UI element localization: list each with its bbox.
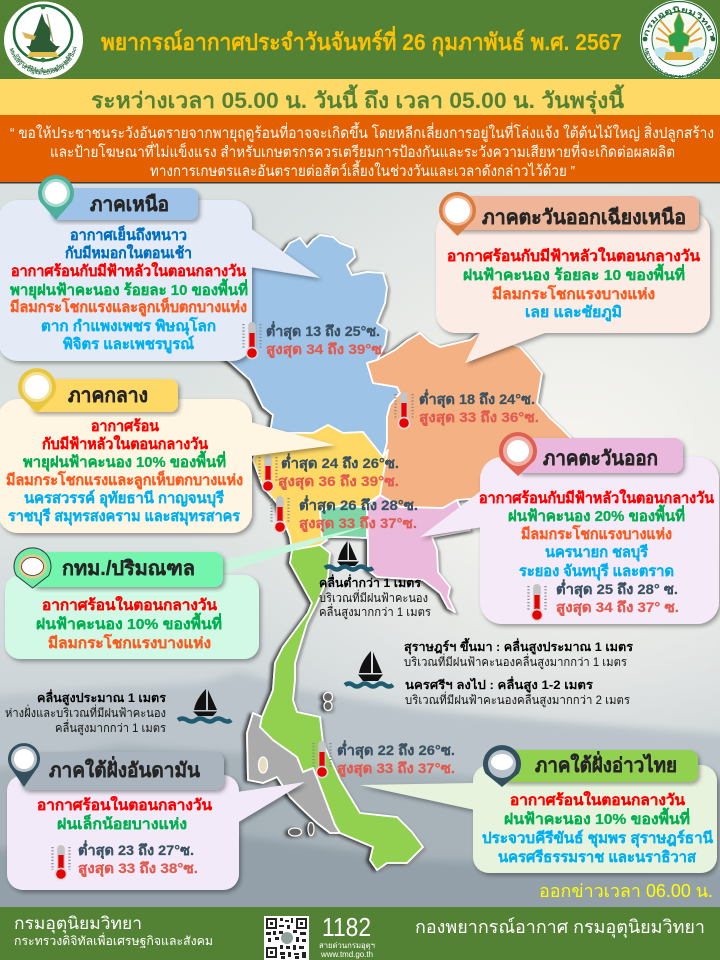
temperature: สูงสุด 33 ถึง 38°ซ. [78, 860, 198, 877]
icon: boat [345, 651, 393, 686]
forecast text: ฝนฟ้าคะนอง 20% ของพื้นที่ [508, 504, 685, 525]
temperature: central lower [272, 495, 418, 533]
islands [258, 692, 332, 836]
callout bubble [0, 200, 320, 361]
panel: northeast [436, 192, 710, 363]
logo: meteorological department: METEOROLOGICAL DEPARTMENT [644, 48, 714, 79]
region: south Gulf coast [260, 545, 423, 870]
callout bubble [5, 575, 259, 659]
heading [30, 552, 223, 587]
forecast text [37, 796, 213, 833]
forecast text: พิจิตร และเพชรบูรณ์ [63, 335, 194, 354]
heading [30, 379, 178, 412]
callout bubble [7, 775, 305, 890]
temperature: north: สูงสุด 34 ถึง 39°ซ. [266, 341, 386, 358]
icon: thermometer [244, 322, 260, 359]
footer [0, 907, 720, 960]
region: central [253, 425, 388, 550]
forecast text [482, 791, 714, 866]
forecast text [36, 596, 222, 652]
icon: pin [483, 745, 521, 787]
temperature: south gulf: สูงสุด 33 ถึง 37°ซ. [337, 760, 455, 777]
issue time: ออกข่าวเวลา 06.00 น. [539, 881, 713, 901]
sea forecast: gulf south [345, 637, 634, 708]
heading [20, 752, 224, 790]
callout bubble [420, 457, 719, 624]
header band [0, 0, 720, 79]
heading: ภาคใต้ฝั่งอ่าวไทย [535, 750, 677, 777]
panel: east [420, 432, 719, 624]
temperature: สูงสุด 34 ถึง 37° ซ. [556, 599, 679, 616]
department name [14, 914, 213, 948]
temperature: north [266, 321, 386, 358]
forecast text: อากาศร้อนในตอนกลางวัน [42, 596, 218, 614]
temperature: central upper: สูงสุด 36 ถึง 39°ซ. [278, 473, 399, 490]
title: พยากรณ์อากาศประจำวันจันทร์ที่ 26 กุมภาพันธ์ พ.ศ. 2567 [101, 25, 622, 57]
temperature: central upper [260, 453, 399, 492]
forecast text: ตาก กำแพงเพชร พิษณุโลก [41, 316, 216, 336]
time range band [0, 79, 720, 115]
forecast text: อากาศเย็นถึงหนาว [70, 225, 187, 244]
department name: กรมอุตุนิยมวิทยา [14, 914, 142, 934]
region: north [200, 235, 400, 457]
forecast text [479, 489, 715, 581]
forecast text: กับมีฟ้าหลัวในตอนกลางวัน [42, 435, 209, 453]
panel: south Andaman coast [7, 743, 305, 890]
forecast text: อากาศร้อนกับมีฟ้าหลัวในตอนกลางวัน [447, 247, 701, 265]
heading: ภาคเหนือ [90, 193, 169, 216]
forecast text: อากาศร้อนในตอนกลางวัน [37, 796, 213, 814]
sea forecast: gulf south: บริเวณที่มีฝนฟ้าคะนองคลื่นสูงมากกว่า 1 เมตร [404, 653, 628, 670]
forecast text: นครศรีธรรมราช และนราธิวาส [498, 848, 697, 866]
forecast text: นครสวรรค์ อุทัยธานี กาญจนบุรี [24, 489, 225, 508]
temperature: northeast: สูงสุด 33 ถึง 36°ซ. [419, 409, 539, 426]
sea forecast: gulf south: บริเวณที่มีฝนฟ้าคะนองคลื่นสูงมากกว่า 2 เมตร [405, 691, 631, 708]
temperature: ต่ำสุด 25 ถึง 28° ซ. [556, 579, 678, 598]
heading [450, 196, 699, 230]
icon: pin [499, 432, 537, 476]
logo: meteorological department: กรมอุตุนิยมวิทยา [644, 6, 714, 38]
forecast text: กับมีหมอกในตอนเช้า [65, 244, 192, 262]
forecast text: พายุฝนฟ้าคะนอง ร้อยละ 10 ของพื้นที่ [10, 278, 248, 300]
icon: pin [18, 368, 56, 413]
region: Bangkok and vicinity [320, 505, 367, 538]
hotline: 1182 [322, 912, 371, 942]
heading [515, 438, 683, 473]
heading [500, 750, 698, 782]
forecast text: มีลมกระโชกแรงและลูกเห็บตกบางแห่ง [6, 470, 243, 490]
heading: ภาคกลาง [68, 385, 148, 407]
heading [50, 188, 198, 220]
callout bubble [436, 212, 710, 363]
forecast text: ฝนฟ้าคะนอง ร้อยละ 10 ของพื้นที่ [463, 263, 685, 284]
forecast text: อากาศร้อนในตอนกลางวัน [510, 791, 686, 809]
heading: ภาคใต้ฝั่งอันดามัน [49, 755, 200, 782]
region: south Andaman coast [247, 713, 340, 833]
map of Thailand [200, 235, 582, 870]
forecast text: เลย และชัยภูมิ [525, 303, 622, 322]
sea forecast: gulf south: สุราษฎร์ฯ ขึ้นมา : คลื่นสูงประมาณ 1 เมตร [404, 637, 634, 655]
forecast text: อากาศร้อน [91, 418, 160, 435]
forecast text: ระยอง จันทบุรี และตราด [519, 563, 674, 581]
hotline: www.tmd.go.th [320, 950, 373, 959]
sea forecast: gulf upper: คลื่นสูงมากกว่า 1 เมตร [319, 603, 432, 620]
forecast text: ฝนฟ้าคะนอง 10% ของพื้นที่ [36, 612, 222, 633]
temperature: central lower: สูงสุด 33 ถึง 37°ซ. [299, 515, 417, 532]
hotline: สายด่วนกรมอุตุฯ [319, 941, 375, 950]
forecast text: อากาศร้อนกับมีฟ้าหลัวในตอนกลางวัน [479, 489, 715, 507]
icon: pin [439, 192, 476, 236]
sea forecast: andaman: คลื่นสูงมากกว่า 1 เมตร [55, 719, 167, 736]
forecast text: มีลมกระโชกแรงบางแห่ง [492, 284, 655, 303]
warning band [0, 115, 720, 184]
heading: ภาคตะวันออกเฉียงเหนือ [482, 206, 686, 229]
region: east [367, 495, 470, 612]
sea forecast: andaman: คลื่นสูงประมาณ 1 เมตร [37, 689, 167, 706]
panel: Bangkok and vicinity [5, 526, 366, 659]
callout bubble [360, 765, 717, 873]
sea forecast: gulf upper: คลื่นต่ำกว่า 1 เมตร [319, 574, 422, 590]
heading: ภาคตะวันออก [543, 448, 658, 470]
temperature [52, 840, 198, 880]
temperature [528, 579, 679, 621]
panel: central [0, 368, 335, 533]
icon: pin [38, 175, 74, 220]
warning band: ทางการเกษตรและอันตรายต่อสัตว์เลี้ยงในช่วงวันและเวลาดังกล่าวไว้ด้วย ” [150, 160, 575, 180]
panel: south Gulf coast [360, 745, 717, 873]
sea forecast: andaman [5, 689, 231, 736]
temperature: northeast [396, 389, 539, 429]
time range band: ระหว่างเวลา 05.00 น. วันนี้ ถึง เวลา 05.00 น. วันพรุ่งนี้ [91, 84, 625, 115]
QR code [264, 916, 309, 960]
icon: pin [8, 743, 40, 787]
temperature: central upper: ต่ำสุด 24 ถึง 26°ซ. [281, 453, 399, 472]
forecast text [6, 418, 243, 526]
temperature: central lower: ต่ำสุด 26 ถึง 28°ซ. [299, 495, 418, 514]
forecast text: ประจวบคีรีขันธ์ ชุมพร สุราษฎร์ธานี [482, 829, 714, 848]
heading: กทม./ปริมณฑล [62, 558, 195, 580]
forecast text: นครนายก ชลบุรี [545, 544, 649, 562]
sea forecast: gulf upper: บริเวณที่มีฝนฟ้าคะนอง [319, 589, 428, 605]
temperature: south gulf [314, 740, 455, 778]
hotline [319, 912, 375, 959]
temperature: south gulf: ต่ำสุด 22 ถึง 26°ซ. [337, 740, 455, 759]
forecast text: มีลมกระโชกแรงบางแห่ง [48, 633, 211, 652]
temperature: northeast: ต่ำสุด 18 ถึง 24°ซ. [419, 389, 535, 408]
forecast text: อากาศร้อนกับมีฟ้าหลัวในตอนกลางวัน [11, 262, 247, 280]
forecast text: ฝนฟ้าคะนอง 10% ของพื้นที่ [504, 807, 690, 828]
forecast bureau: กองพยากรณ์อากาศ กรมอุตุนิยมวิทยา [415, 917, 705, 938]
temperature: ต่ำสุด 23 ถึง 27°ซ. [78, 840, 194, 859]
sea forecast: gulf south: นครศรีฯ ลงไป : คลื่นสูง 1-2 เมตร [405, 676, 594, 693]
forecast text: พายุฝนฟ้าคะนอง 10% ของพื้นที่ [23, 450, 226, 472]
sea forecast: andaman: ห่างฝั่งและบริเวณที่มีฝนฟ้าคะนอง [5, 704, 166, 720]
background: misty mountains [0, 183, 720, 920]
region: northeast [367, 333, 582, 508]
thermometers and temperatures on map [260, 321, 539, 778]
icon: boat [178, 689, 231, 722]
forecast text: ราชบุรี สมุทรสงคราม และสมุทรสาคร [8, 508, 241, 526]
panel: north [0, 175, 320, 361]
logo: meteorological department [640, 0, 718, 79]
sea forecast: gulf upper [319, 541, 432, 620]
icon: boat [325, 541, 373, 570]
department name: กระทรวงดิจิทัลเพื่อเศรษฐกิจและสังคม [14, 932, 213, 948]
callout bubble [0, 399, 335, 533]
forecast text [447, 247, 701, 322]
forecast text: มีลมกระโชกแรงบางแห่ง [521, 524, 672, 543]
icon: pin [14, 548, 51, 588]
forecast text: มีลมกระโชกแรงและลูกเห็บตกบางแห่ง [10, 297, 247, 317]
callout tail [220, 526, 366, 575]
temperature: north: ต่ำสุด 13 ถึง 25°ซ. [266, 321, 380, 340]
forecast text: ฝนเล็กน้อยบางแห่ง [57, 814, 187, 833]
forecast text [10, 225, 248, 354]
